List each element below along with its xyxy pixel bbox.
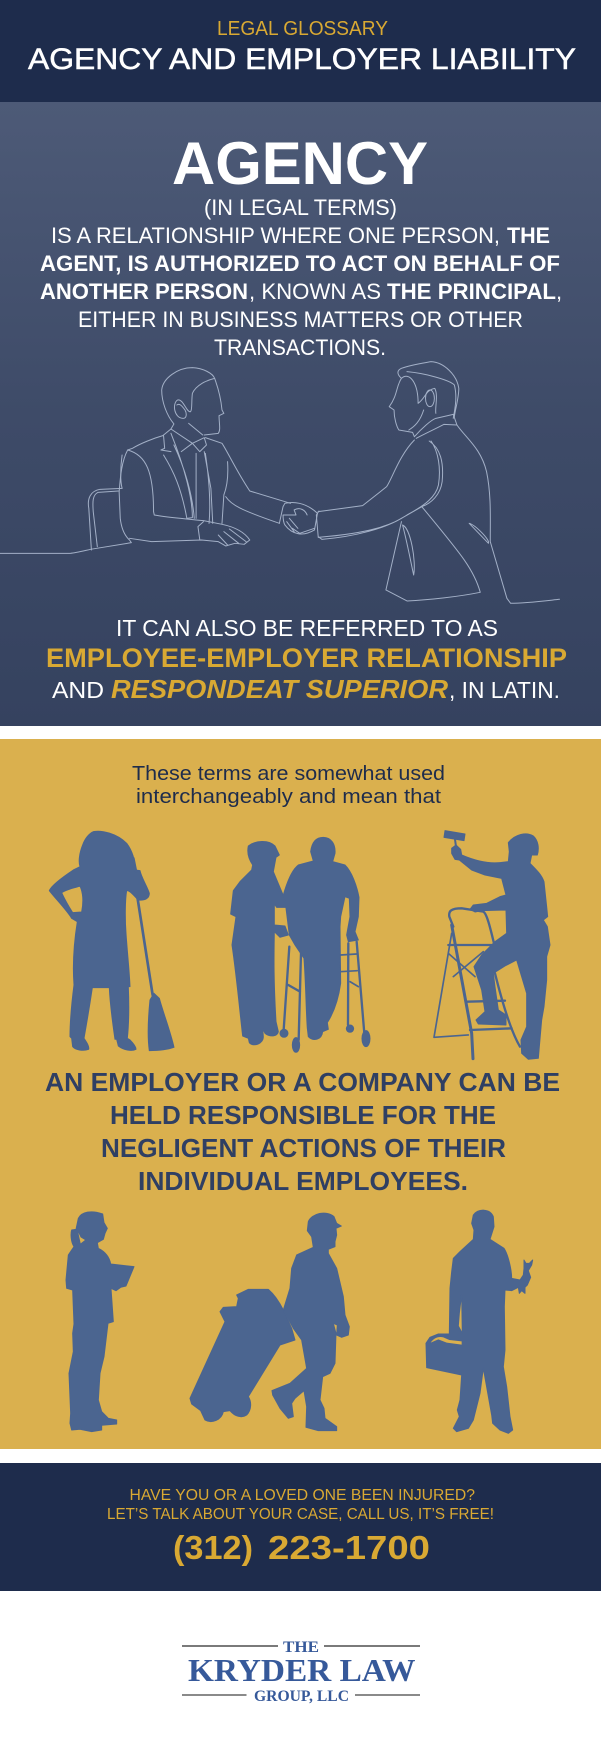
phone number [173, 1529, 430, 1566]
text block: respondeat superior: , IN LATIN. [449, 677, 560, 703]
panel: header [0, 0, 601, 102]
icon: mechanic with toolbox and wrench [426, 1210, 533, 1433]
highlight: employee-employer relationship: EMPLOYEE-EMPLOYER RELATIONSHIP [46, 643, 567, 673]
icon: woman with tablet [66, 1212, 134, 1432]
label: legal glossary: LEGAL GLOSSARY [217, 18, 388, 40]
statement: employer can be held responsible [45, 1067, 560, 1196]
statement: employer can be held responsible: INDIVIDUAL EMPLOYEES. [138, 1166, 468, 1196]
icon: nurse helping patient with walker [231, 837, 370, 1052]
panel: call to action [0, 1463, 601, 1591]
text block: definition [40, 223, 562, 360]
text block: definition: , KNOWN AS [249, 279, 381, 304]
heading: agency: AGENCY [172, 130, 428, 197]
text block: definition: ANOTHER PERSON [40, 279, 248, 304]
text block: definition: THE PRINCIPAL [387, 279, 556, 304]
text block: cta: HAVE YOU OR A LOVED ONE BEEN INJURED? [130, 1487, 475, 1504]
text block: intro: These terms are somewhat used [132, 763, 445, 785]
statement: employer can be held responsible: AN EMPLOYER OR A COMPANY CAN BE [45, 1067, 560, 1097]
icon: woman with broom [49, 831, 174, 1051]
text block: definition: , [556, 279, 562, 304]
phone number: 223-1700 [268, 1529, 430, 1566]
text block: intro: interchangeably and mean that [136, 786, 441, 808]
text block: definition: EITHER IN BUSINESS MATTERS OR OTHER [78, 307, 523, 332]
text block: also referred to as: IT CAN ALSO BE REFERRED TO AS [116, 615, 498, 641]
text block: intro [132, 763, 445, 808]
text block: definition: TRANSACTIONS. [214, 335, 386, 360]
text block: cta: LET’S TALK ABOUT YOUR CASE, CALL US, IT’S FREE! [107, 1506, 494, 1523]
text block: definition: THE [507, 223, 550, 248]
panel: employer responsibility [0, 739, 601, 1449]
title: AGENCY AND EMPLOYER LIABILITY [28, 43, 576, 76]
text block: definition: IS A RELATIONSHIP WHERE ONE PERSON, [51, 223, 500, 248]
illustration: handshake line art [0, 362, 559, 603]
logo: the kryder law group [182, 1639, 420, 1705]
text block: respondeat superior: RESPONDEAT SUPERIOR [111, 674, 448, 704]
text block: cta [107, 1487, 494, 1523]
phone number: (312) [173, 1529, 253, 1566]
text block: definition: AGENT, IS AUTHORIZED TO ACT ON BEHALF OF [40, 251, 560, 276]
statement: employer can be held responsible: HELD RESPONSIBLE FOR THE [110, 1100, 496, 1130]
logo: the kryder law group: THE [283, 1639, 319, 1656]
logo: the kryder law group: GROUP, LLC [254, 1688, 349, 1705]
logo: the kryder law group: KRYDER LAW [188, 1652, 416, 1688]
statement: employer can be held responsible: NEGLIGENT ACTIONS OF THEIR [101, 1133, 506, 1163]
icon: painter on ladder [434, 831, 550, 1059]
panel: agency definition [0, 102, 601, 726]
text block: respondeat superior: AND [52, 677, 104, 703]
text block: respondeat superior [52, 674, 560, 704]
subheading: in legal terms: (IN LEGAL TERMS) [204, 195, 397, 220]
icon: worker pulling bin [190, 1213, 349, 1431]
